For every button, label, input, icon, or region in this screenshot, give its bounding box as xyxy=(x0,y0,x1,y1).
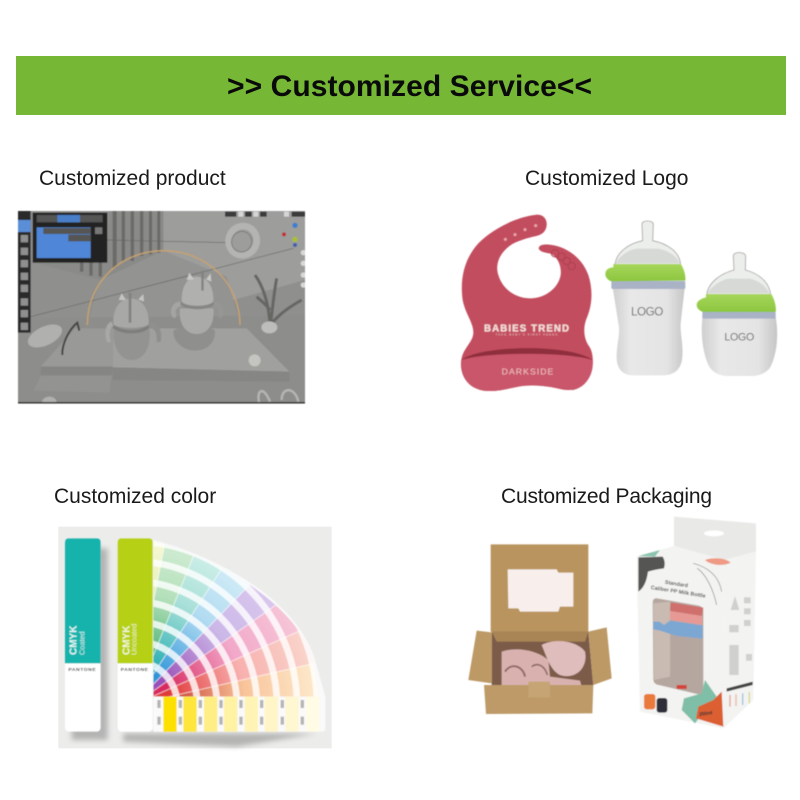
header banner xyxy=(16,56,786,115)
image: 3D product modelling scene xyxy=(18,211,306,409)
heading: customized packaging: Customized Packaging xyxy=(501,485,712,508)
large bottle xyxy=(605,221,685,375)
coated guide sublabel: Coated xyxy=(77,631,86,655)
large bottle logo: LOGO xyxy=(631,305,663,318)
image: kraft box and retail bottle box xyxy=(468,517,756,728)
box volume label: 250ml xyxy=(699,710,713,718)
bottom hooks xyxy=(258,391,270,403)
coated guide brand: PANTONE xyxy=(68,667,96,673)
right bottle xyxy=(171,271,224,351)
small bottle logo: LOGO xyxy=(724,331,754,343)
coated guide card xyxy=(65,538,101,732)
bib lower brand: DARKSIDE xyxy=(502,367,554,377)
heading: customized logo: Customized Logo xyxy=(525,167,688,190)
bib tagline: TAKE BABY'S FIRST FEEDS xyxy=(496,333,557,337)
toolbar xyxy=(18,211,31,333)
bib xyxy=(461,215,593,391)
bib brand text: BABIES TREND xyxy=(484,324,569,335)
striped wall xyxy=(80,211,160,277)
plant xyxy=(255,275,302,323)
box window xyxy=(653,598,703,695)
box title line 2: Caliber PP Milk Bottle xyxy=(650,585,706,600)
image: silicone bib and logo bottles xyxy=(461,215,777,391)
floor xyxy=(18,315,305,403)
settings panel xyxy=(33,213,107,263)
kraft box xyxy=(468,544,612,714)
uncoated guide brand: PANTONE xyxy=(121,667,149,673)
side panel details xyxy=(727,682,753,692)
shadows xyxy=(72,548,317,747)
uncoated guide sublabel: Uncoated xyxy=(130,624,139,655)
left bottle xyxy=(105,293,161,360)
top-right icons xyxy=(225,212,305,217)
image: Pantone CMYK colour guides xyxy=(58,526,332,750)
ball, shell, hook xyxy=(249,354,261,366)
torus xyxy=(224,222,261,259)
heading: customized product: Customized product xyxy=(39,167,226,190)
platforms xyxy=(41,328,113,367)
colour fan xyxy=(70,538,325,732)
small bottle xyxy=(697,252,777,376)
arch xyxy=(87,251,240,325)
banner title: >> Customized Service<< xyxy=(227,70,592,103)
pink contents xyxy=(502,641,586,687)
uncoated guide card xyxy=(118,538,153,732)
yellow swatch row xyxy=(157,697,319,732)
retail box xyxy=(637,517,756,728)
box colour shapes xyxy=(638,557,665,592)
bottle in window xyxy=(670,602,703,616)
heading: customized color: Customized color xyxy=(54,485,216,508)
coated guide label: CMYK xyxy=(69,625,80,655)
box title line 1: Standard xyxy=(664,580,688,589)
uncoated guide label: CMYK xyxy=(121,625,132,655)
